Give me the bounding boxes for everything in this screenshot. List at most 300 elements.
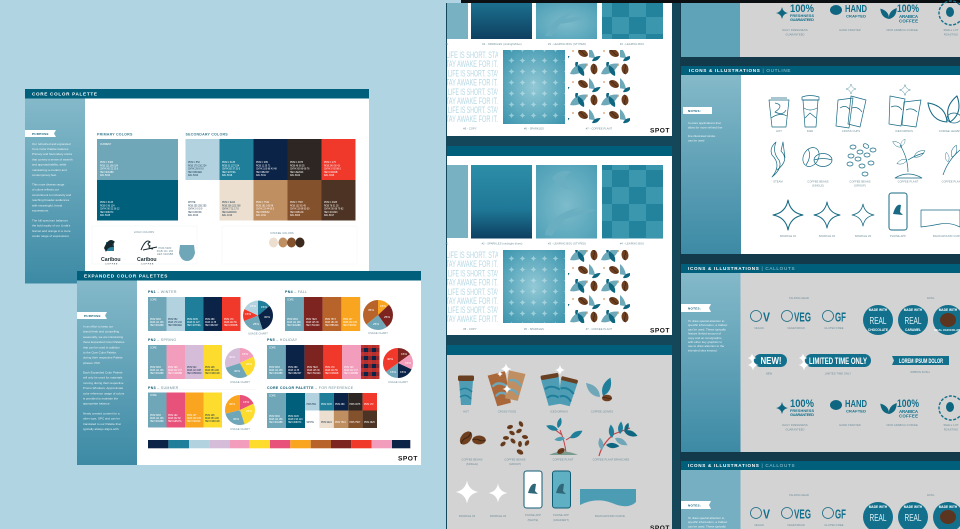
pattern tile: copy: LIFE IS SHORT. STAY — [448, 268, 500, 278]
expanded palettes sidebar: In an effort to keep our — [83, 324, 113, 328]
tile captions row 2: #5 - COPY — [463, 126, 477, 130]
callouts header: ICONS & ILLUSTRATIONS | CALLOUTS — [688, 266, 795, 271]
tile captions: #4 - LEAPING BOU — [620, 242, 644, 246]
secondary color swatches: CMYK 29 8 9 0 — [188, 169, 204, 171]
badge: hand crafted: CRAFTED — [846, 14, 866, 18]
pattern tile: copy: LIFE IS SHORT. STAY — [448, 287, 500, 297]
tile captions row 2: #6 - SPARKLES — [524, 327, 544, 331]
captions: ROASTING — [944, 428, 958, 432]
core palette sidebar: that convey a sense of warmth — [32, 157, 73, 161]
SPOT logo: SPOT — [398, 456, 418, 462]
secondary color swatches: RGB 179 210 224 — [188, 165, 207, 167]
palette PN5 holiday: RGB 111 166 — [269, 370, 283, 372]
shape: background curve — [580, 489, 636, 506]
palette PN2 spring: PMS 524 — [187, 367, 197, 369]
palette PN1 winter: PMS 289 — [205, 319, 215, 321]
secondary color swatches: HEX 4C3323 — [324, 212, 338, 214]
secondary color swatches: HEX B3D2E0 — [188, 172, 203, 174]
palette PN4 fall: 35% — [368, 308, 374, 312]
icon outline: iced cross cups — [889, 84, 921, 127]
core color palette for reference: PMS 7567 — [350, 422, 361, 424]
real ingredient badges: REAL — [904, 315, 922, 327]
secondary color swatches: RGB 255 255 255 — [188, 205, 207, 207]
outline captions row 1: ICED DRINKS — [895, 129, 913, 133]
badge: freshness: GUARANTEED — [790, 18, 814, 22]
expanded palettes sidebar: that can be used in addition — [83, 345, 120, 349]
palette PN5 holiday: USAGE CHART — [388, 380, 408, 384]
palette PN4 fall: PN4 – FALL — [285, 290, 307, 294]
secondary color swatches: PMS C 4625 — [324, 202, 338, 204]
callouts sidebar: NOTES: — [688, 306, 701, 310]
expanded palettes sidebar: seasonally, we are introducing — [83, 335, 123, 339]
real ingredient badges: REAL — [870, 315, 887, 327]
badge: freshness: 100% — [790, 3, 814, 15]
icon outline: cross cups — [836, 84, 866, 128]
outline captions row 3: SPARKLE #1 — [780, 234, 797, 238]
badge: arabica: ARABICA — [899, 14, 919, 19]
palette PN3 summer: PMS 137 — [187, 415, 197, 417]
palette PN4 fall: PMS 7622 — [306, 319, 317, 321]
dietary callouts: VEGAN — [754, 326, 764, 330]
secondary color swatches: HEX FFFFFF — [188, 212, 202, 214]
palette PN1 winter: HEX 6FA6B8 — [150, 324, 164, 327]
core color palette for reference: CORE — [269, 396, 276, 398]
expanded palettes sidebar: brand fresh and compelling — [83, 330, 120, 334]
illustration captions row 1: COFFEE LEAVES — [591, 410, 613, 414]
core palette sidebar: cooler range of expressions — [32, 234, 69, 238]
dietary callouts — [750, 506, 846, 527]
badge: hand crafted: HAND — [845, 4, 867, 15]
secondary color swatches: PMS C 552 — [188, 162, 200, 164]
pie chart PN3 — [232, 402, 248, 418]
secondary color swatches: RGB 76 51 35 — [324, 205, 339, 207]
palette PN3 summer: 30% — [229, 402, 235, 406]
secondary color swatches: RGB 191 143 98 — [256, 205, 274, 207]
tile captions: #3 - LEAPING BOU (STYPED) — [548, 242, 586, 246]
core color palette for reference: RGB 0 96 124 — [288, 419, 303, 421]
tile captions row 2: #6 - SPARKLES — [524, 126, 544, 130]
badge: arabica: 100% — [897, 3, 919, 15]
core palette sidebar: maintaining a modern and — [32, 168, 67, 172]
palette PN4 fall — [285, 290, 390, 335]
badge: freshness: 100% — [790, 398, 814, 410]
palette PN5 holiday: PMS 7622 — [307, 367, 318, 369]
outline sidebar: In-store applications that — [688, 121, 721, 125]
icon outline: phone — [889, 193, 907, 230]
captions: DAILY FRESHNESS — [782, 28, 808, 32]
palette PN2 spring: HEX FDDC2D — [205, 373, 220, 375]
outline captions row 3: SPARKLE #3 — [855, 234, 872, 238]
panel: patterns page 2 — [442, 156, 672, 335]
palette PN2 spring: PMS 5483 — [150, 367, 161, 369]
real ingredient badges: CHOCOLATE — [868, 328, 888, 332]
palette PN5 holiday: RGB 242 157 — [344, 370, 359, 372]
white area — [741, 75, 960, 254]
expanded palettes sidebar: to the Core Color Palette, — [83, 350, 117, 354]
palette PN4 fall: PMS 137 — [343, 319, 353, 321]
palette PN3 summer: RGB 249 165 — [187, 418, 202, 420]
primary color swatches: RAL 5024 — [100, 174, 111, 177]
palette PN4 fall: RGB 249 165 — [343, 322, 358, 324]
illustration captions row 2 — [461, 458, 630, 466]
real ingredient badges: MADE WITH — [869, 308, 888, 312]
palette PN4 fall: HEX 7D2420 — [306, 325, 320, 327]
outline captions row 2 — [773, 180, 960, 188]
logo: black emblem: Caribou — [137, 257, 157, 263]
palette PN2 spring: HEX F29DBB — [168, 373, 183, 375]
pattern tile: sparkle stars — [503, 250, 565, 323]
core palette sidebar: commitment to inclusivity and — [32, 193, 72, 197]
illustration captions row 3: SPARKLE #3 — [459, 514, 476, 518]
illustration captions row 3: SPARKLE #4 — [490, 514, 507, 518]
palette PN5 holiday: RGB 125 36 — [307, 370, 320, 372]
callouts header — [681, 461, 960, 470]
callouts sidebar: with other key graphics to — [688, 340, 722, 344]
logo: black emblem: COFFEE — [141, 264, 154, 266]
callout captions: LIMITED TIME ONLY — [825, 372, 851, 376]
palette PN3 summer: HEX 6FA6B8 — [150, 420, 164, 423]
illustration captions row 1: CROSS FOOD — [498, 410, 516, 414]
primary color swatches: CURRENT — [100, 144, 112, 146]
secondary color swatches: PMS C 4975 — [290, 162, 304, 164]
palette PN2 spring: RGB 242 157 — [168, 370, 183, 372]
palette PN1 winter: USAGE CHART — [248, 332, 268, 336]
limited time callout: LIMITED TIME ONLY — [809, 356, 867, 367]
badge: freshness: FRESHNESS — [790, 14, 814, 18]
secondary color swatches: RAL 8017 — [324, 214, 335, 217]
core palette sidebar: the bold equity of our Linda's — [32, 224, 71, 228]
panel: callouts 2 (cropped) — [681, 461, 960, 529]
core color palette for reference: PMS 3135 — [321, 404, 332, 406]
logo colors box: RGB 111 166 — [157, 249, 174, 253]
core palette sidebar: of colors reflects our — [32, 188, 59, 192]
secondary color swatches: CMYK 50 68 79 62 — [324, 209, 344, 211]
pattern tile: sparkles midnight — [471, 165, 532, 238]
tile captions: #2 - SPARKLES (midnight/blue) — [482, 42, 522, 46]
real ingredient badges: MADE WITH — [869, 505, 888, 509]
palette PN3 summer: 25% — [246, 409, 252, 413]
palette PN3 summer: PN3 – SUMMER — [148, 386, 179, 390]
dietary callouts: V — [763, 310, 770, 324]
pattern tile: copy — [447, 52, 498, 122]
panel: callouts 1 — [681, 264, 960, 452]
palette PN3 summer: HEX E8527A — [168, 420, 182, 423]
icons: sparkles — [456, 480, 508, 504]
core color palette for reference: PMS 4975 — [350, 404, 361, 406]
secondary color swatches: PMS C 289 — [256, 162, 268, 164]
icon outline: plant — [892, 138, 926, 178]
callouts sidebar: NOTES: — [688, 504, 701, 508]
expanded palettes sidebar: Each Expanded Color Palette — [83, 370, 123, 374]
outline sidebar: line illustrated stroke — [688, 134, 716, 138]
palette PN2 spring: RGB 111 166 — [150, 370, 164, 372]
outline captions row 2: COFFEE PLANT — [898, 180, 919, 184]
core palette sidebar: This more diverse range — [32, 182, 65, 186]
dark backdrop: pattern column — [446, 0, 682, 529]
dietary callouts — [750, 310, 846, 330]
palette PN3 summer: HEX FDDC2D — [205, 421, 220, 423]
illustration captions row 3: BACKGROUND CURVE — [595, 514, 625, 518]
expanded palettes sidebar: other type, SPC and can be — [83, 417, 120, 421]
panel: icons outline — [681, 66, 960, 254]
illustration captions row 3: PHONE APP — [525, 513, 541, 517]
tile captions: #3 - LEAPING BOU (STYPED) — [548, 42, 586, 46]
tile captions: #1 — [445, 42, 449, 46]
core palette sidebar: The full spectrum balances — [32, 218, 68, 222]
ribbon callout — [892, 356, 949, 365]
badge: hand crafted: HAND — [845, 399, 867, 410]
callouts sidebar: feature limited amount of — [688, 332, 721, 336]
pattern tile: leaping bird — [536, 3, 597, 39]
secondary color swatches: HEX ECDFD0 — [222, 212, 237, 214]
real ingredient badges — [863, 305, 960, 335]
palette PN2 spring: 30% — [229, 355, 235, 359]
palette PN3 summer: CORE — [150, 395, 157, 397]
palette PN2 spring: 15% — [242, 352, 248, 356]
primary color swatches: PMS C 5483 — [100, 162, 114, 164]
core color palette for reference: PMS 5483 — [269, 416, 280, 418]
palette PN5 holiday: PMS 179 — [325, 367, 335, 369]
badge: arabica: 100% — [897, 398, 919, 410]
logo colors box: LOGO COLORS — [134, 230, 154, 234]
core color palette for reference: PMS 9224 — [321, 422, 332, 424]
secondary color swatches: RAL 1011 — [256, 214, 267, 217]
secondary color swatches: HEX BF8F62 — [256, 212, 270, 214]
real ingredient badges: CARAMEL — [905, 328, 921, 332]
secondary color swatches: RAL 5018 — [222, 174, 233, 177]
core color palette for reference: PMS 179 — [364, 404, 374, 406]
dietary callouts: VEGETARIAN — [787, 523, 805, 527]
palette PN1 winter: HEX B3D2E0 — [168, 325, 183, 327]
expanded palettes sidebar: is provided to maintain the — [83, 396, 118, 400]
palette PN2 spring: 25% — [246, 362, 252, 366]
palette PN5 holiday: RGB 11 35 — [288, 370, 300, 372]
palette PN5 holiday: HEX F29DBB — [344, 373, 359, 375]
palette PN4 fall: PMS 5483 — [287, 319, 298, 321]
pattern tile: copy: STAY AWAKE FOR IT. — [442, 78, 498, 88]
pie chart PN2 — [232, 356, 248, 370]
grey area — [740, 470, 960, 529]
illustration captions row 3: PHONE APP — [553, 513, 569, 517]
expanded palettes sidebar: PURPOSE — [84, 314, 101, 318]
group captions — [789, 296, 935, 300]
icon outline: leaves — [924, 95, 960, 126]
secondary color swatches: RAL 5011 — [256, 174, 267, 177]
captions: SMALL LOT — [943, 423, 959, 427]
SPOT logo: SPOT — [650, 328, 670, 334]
top black edge — [461, 0, 960, 3]
badge: arabica — [878, 398, 919, 418]
pattern tile: copy: STAY AWAKE FOR IT. — [442, 259, 498, 269]
pie chart PN5 — [390, 356, 406, 370]
pie chart PN1 — [250, 308, 266, 323]
palette PN2 spring — [148, 338, 252, 384]
secondary color swatches: RAL 3028 — [324, 174, 335, 177]
palette PN1 winter: PMS 552 — [168, 319, 178, 321]
palette PN5 holiday: HEX F0382B — [325, 373, 339, 375]
expanded palettes sidebar: these Expanded Color Palettes — [83, 340, 125, 344]
secondary color swatches: CMYK 82 37 30 3 — [222, 169, 241, 171]
badge: hand crafted — [830, 399, 867, 414]
palette PN3 summer: PMS 5483 — [150, 415, 161, 417]
outline captions row 1: CROSS CUPS — [842, 129, 860, 133]
outline header — [681, 66, 960, 75]
secondary color swatches: RGB 31 127 154 — [222, 165, 240, 167]
palette PN5 holiday: HEX 0B2347 — [288, 373, 302, 375]
pattern tile: sparkle gradient — [471, 3, 532, 39]
palette PN5 holiday — [267, 338, 411, 384]
secondary color swatches: PMS C 179 — [324, 162, 336, 164]
palette PN3 summer: RGB 253 220 — [205, 418, 220, 420]
pattern tile: core — [447, 165, 468, 238]
captions: HAND CRAFTED — [839, 28, 861, 32]
pattern tile: leaping bou — [536, 165, 597, 238]
core palette sidebar: Garnet and orange in a more — [32, 229, 71, 233]
outline sidebar: allow for more refined line — [688, 126, 723, 130]
pattern tile: checker — [602, 3, 663, 39]
captions: GUARANTEED — [785, 32, 805, 36]
core color palette for reference: RGB 111 166 — [269, 419, 283, 421]
secondary color swatches: CMYK 33 69 90 30 — [290, 209, 310, 211]
primary color swatches: RGB 111 166 184 — [100, 165, 119, 167]
palette PN2 spring: 30% — [234, 369, 240, 373]
badge: freshness: GUARANTEED — [790, 413, 814, 417]
secondary color swatches: CMYK 100 88 43 48 — [256, 169, 277, 171]
palette PN5 holiday: 15% — [390, 370, 396, 374]
header band page 2 — [447, 146, 672, 156]
panel: callouts top (cropped) — [681, 1, 960, 57]
callouts header — [681, 264, 960, 273]
logo: color emblem — [101, 240, 121, 266]
outline sidebar — [681, 75, 741, 254]
palette PN5 holiday: PN5 – HOLIDAY — [267, 338, 298, 342]
expanded palettes sidebar: during their respective Palette — [83, 356, 123, 360]
tile captions row 2 — [463, 327, 613, 331]
callouts sidebar: can be used. These typically — [688, 524, 726, 528]
badge: arabica: COFFEE — [899, 18, 918, 24]
secondary color swatches: HEX 0B2347 — [256, 172, 270, 174]
primary color swatches — [97, 139, 178, 220]
secondary color swatches: CMYK 0 92 88 0 — [324, 169, 342, 171]
pattern tile: copy: STAY AWAKE FOR IT. — [442, 296, 498, 306]
palette PN3 summer: 15% — [243, 400, 249, 404]
palette PN2 spring: PMS 189 — [168, 367, 178, 369]
outline captions row 3: PHONE APP — [890, 234, 906, 238]
icon outline: branch — [943, 144, 960, 175]
palette PN2 spring: HEX 6FA6B8 — [150, 372, 164, 375]
outline captions row 3: SPARKLE #2 — [819, 234, 836, 238]
palette PN1 winter: HEX 1F7F9A — [187, 324, 201, 327]
palette PN1 winter: PMS 5483 — [150, 319, 161, 321]
secondary color swatches: RGB 236 223 208 — [222, 205, 241, 207]
panel: patterns page 1 — [442, 3, 672, 136]
logo: cup sleeve — [179, 245, 195, 261]
secondary color swatches: HEX 2E2623 — [290, 172, 304, 174]
secondary color swatches: RAL 8022 — [290, 174, 301, 177]
secondary color swatches: PMS C 9224 — [222, 202, 236, 204]
pattern tile: sparkle stars — [503, 50, 565, 124]
core palette sidebar: Primary and Secondary colors — [32, 152, 73, 156]
badge: freshness: FRESHNESS — [790, 409, 814, 413]
palette PN1 winter: RGB 240 56 — [224, 322, 237, 324]
palette PN1 winter: RGB 179 210 — [168, 322, 183, 324]
palette PN3 summer: USAGE CHART — [230, 427, 250, 431]
secondary color swatches: HEX F0382B — [324, 172, 338, 174]
palette PN1 winter: PMS 179 — [224, 319, 234, 321]
palette PN1 winter: RGB 31 127 — [187, 322, 200, 324]
group captions: ETAIL — [927, 493, 935, 497]
icon: phone teal — [552, 471, 570, 508]
primary color swatches: PMS C 3145 — [100, 202, 114, 204]
secondary color swatches: PMS C 7510 — [256, 202, 270, 204]
header band page 3 — [447, 345, 672, 355]
palette PN5 holiday: PMS 189 — [344, 367, 354, 369]
dietary callouts: V — [763, 506, 770, 522]
palette PN1 winter: HEX F0382B — [224, 325, 238, 327]
palette PN2 spring: HEX D5BCD9 — [187, 373, 202, 375]
core palette sidebar: contemporary feel. — [32, 173, 57, 177]
captions: DAILY FRESHNESS — [782, 423, 808, 427]
palette PN5 holiday: 15% — [401, 352, 407, 356]
SPOT logo: SPOT — [650, 128, 670, 134]
pie chart PN4 — [370, 308, 386, 322]
expanded palettes sidebar: typically always aligns with. — [83, 427, 120, 431]
dietary callouts: GF — [835, 506, 846, 522]
panel: expanded color palettes — [77, 271, 421, 465]
palette PN2 spring: RGB 213 188 — [187, 370, 202, 372]
tile captions row 2 — [463, 126, 613, 130]
logo colors box — [92, 226, 197, 266]
secondary color swatches: RGB 132 81 45 — [290, 205, 307, 207]
core color palette for reference: PMS 289 — [335, 404, 345, 406]
group captions — [789, 493, 935, 497]
palette PN4 fall: RGB 125 36 — [306, 322, 319, 324]
expanded palettes sidebar: Promo Windows. Approximate — [83, 386, 124, 390]
palette PN3 summer: RGB 232 82 — [168, 418, 181, 420]
callouts sidebar: use to draw attention to the — [688, 344, 725, 348]
real ingredient badges: REAL — [904, 512, 922, 524]
secondary colors heading: SECONDARY COLORS — [186, 132, 228, 136]
icon outline: sparkles — [773, 200, 874, 230]
palette PN5 holiday: CORE — [269, 348, 276, 350]
real ingredient badges: MADE WITH — [939, 308, 958, 312]
expanded palettes header — [77, 271, 421, 280]
real ingredient badges: REAL — [870, 512, 887, 524]
dietary callouts: GLUTEN FREE — [824, 523, 844, 527]
pattern tile: copy: STAY AWAKE FOR IT. — [442, 314, 498, 324]
callouts sidebar: can be used. These typically — [688, 327, 726, 331]
illustration captions row 2: (SINGLE) — [466, 462, 478, 466]
dietary callouts: GF — [835, 310, 846, 324]
outline captions row 3 — [780, 234, 960, 238]
palette PN2 spring: RGB 253 220 — [205, 370, 220, 372]
icon: coffee beans — [457, 429, 486, 447]
palette PN5 holiday: 15% — [405, 361, 411, 365]
group captions: ETAIL — [927, 296, 935, 300]
callout captions: NEW — [766, 372, 773, 376]
palette PN1 winter: PMS 3135 — [187, 319, 198, 321]
palette PN4 fall: RGB 184 99 — [325, 322, 338, 324]
badge: arabica: COFFEE — [899, 414, 918, 418]
icon: coffee leaves — [583, 376, 614, 401]
icon: phone white — [524, 471, 542, 508]
group captions: TALKING HEAD — [789, 493, 809, 497]
secondary color swatches: RAL 9010 — [188, 214, 199, 217]
icon outline: iced cup — [802, 96, 819, 127]
primary color swatches: HEX 6FA6B8 — [100, 171, 114, 174]
badge: small lot roasted — [939, 396, 960, 420]
logo: color emblem: Caribou — [101, 257, 121, 263]
